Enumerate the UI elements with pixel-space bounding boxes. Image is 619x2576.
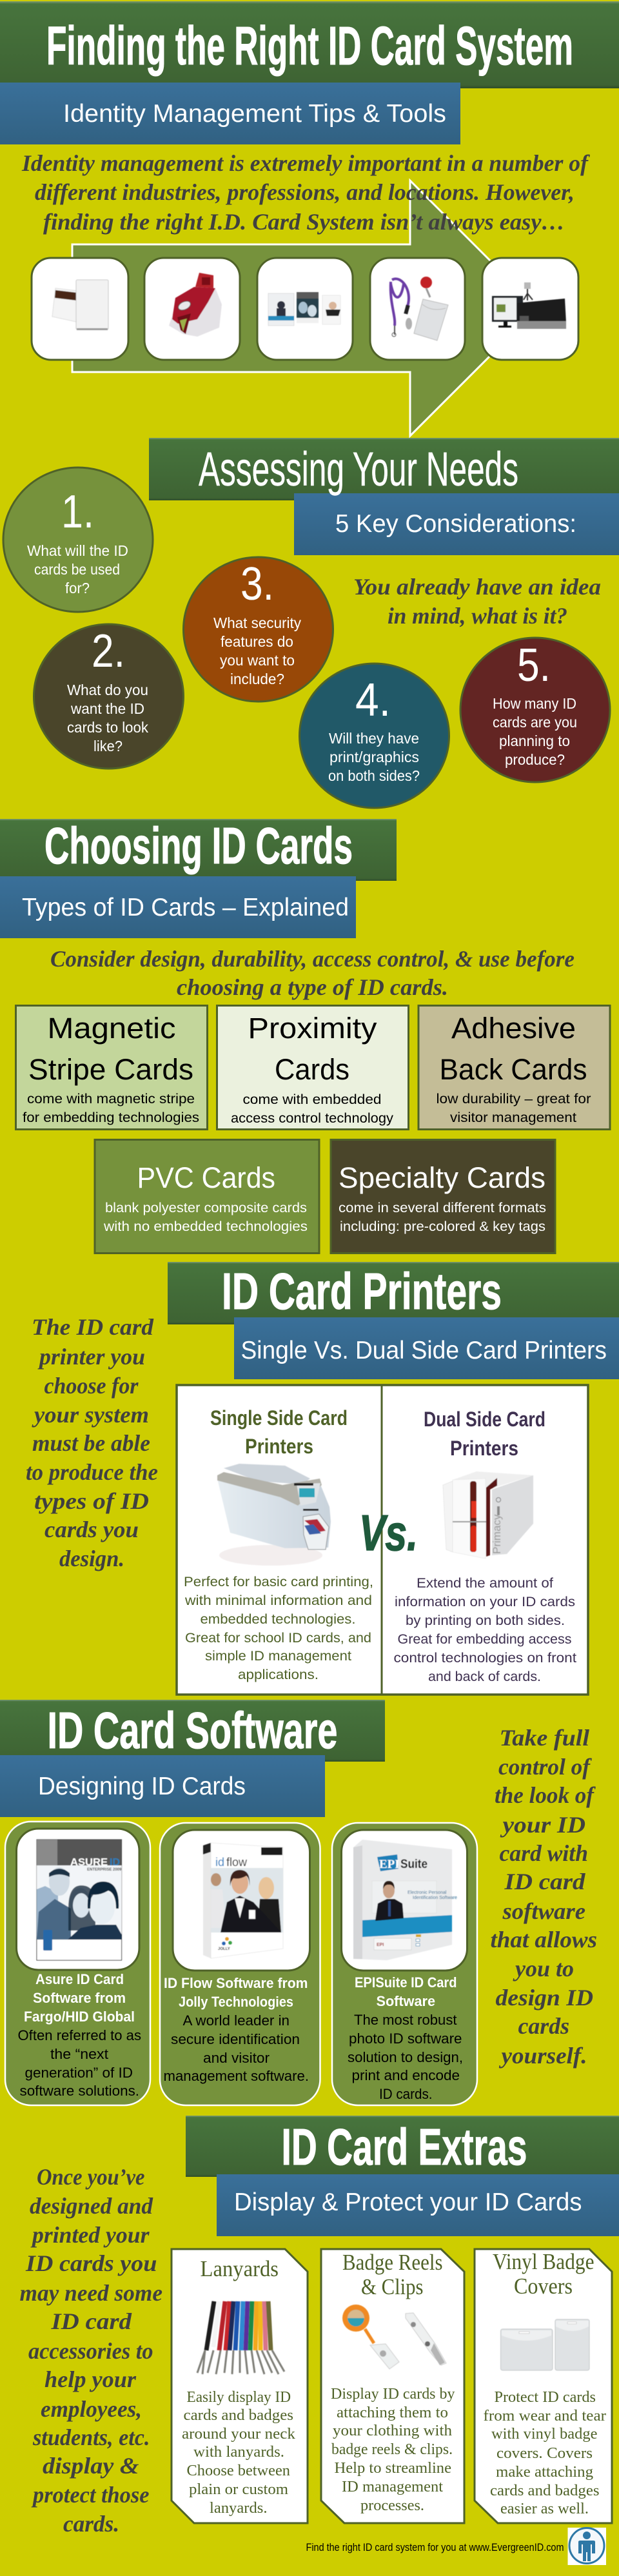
intro text: Identity management is extremely important in a number of <box>21 150 590 176</box>
script note: printer choice: to produce the <box>26 1459 158 1485</box>
script note: printer choice: choose for <box>44 1373 139 1399</box>
panel: vinyl badge covers <box>475 2249 612 2523</box>
software name: ID Flow Software from <box>164 1975 308 1991</box>
description: with lanyards. <box>193 2444 284 2461</box>
heading: Choosing ID Cards <box>44 817 353 874</box>
description <box>182 2389 295 2517</box>
icon: badge clip <box>406 2313 446 2365</box>
description: attaching them to <box>337 2404 448 2421</box>
icon: single side printer <box>217 1464 331 1566</box>
script note: printer choice: your system <box>32 1402 149 1428</box>
software name: EPISuite ID Card <box>355 1974 457 1991</box>
dual side heading: Printers <box>450 1437 518 1460</box>
software name: Fargo/HID Global <box>24 2009 135 2025</box>
script note: software: card with <box>499 1840 588 1866</box>
software name <box>164 1975 308 2010</box>
heading <box>493 2249 594 2299</box>
heading: & Clips <box>361 2274 423 2299</box>
script note: accessories: Once you’ve <box>37 2164 145 2190</box>
script note: software: control of <box>498 1754 592 1780</box>
panel: magnetic stripe cards: Magnetic <box>48 1012 175 1045</box>
software name: Software <box>377 1993 435 2009</box>
description: cards and badges <box>490 2483 600 2499</box>
icon: id flow box: flow <box>226 1856 248 1869</box>
circle 3: include? <box>230 671 284 687</box>
circle 3: features do <box>221 633 293 650</box>
panel: pvc cards: PVC Cards <box>137 1161 275 1194</box>
panel: pvc cards <box>95 1140 319 1254</box>
panel: proximity cards: come with embedded <box>242 1092 382 1107</box>
single side text: applications. <box>238 1667 319 1682</box>
panel: adhesive back cards: Adhesive <box>451 1012 576 1045</box>
circle 2: like? <box>93 738 123 754</box>
icon: red printer <box>169 273 222 337</box>
software description: photo ID software <box>349 2030 462 2047</box>
section header: choosing id cards <box>0 817 397 938</box>
subtitle: Identity Management Tips & Tools <box>63 100 446 128</box>
circle 1: cards be used <box>34 561 120 578</box>
circle 1: for? <box>65 580 90 596</box>
script note: accessories <box>19 2164 162 2537</box>
script note: your idea <box>353 574 601 629</box>
software name: Jolly Technologies <box>179 1994 293 2010</box>
script note: printer choice: design. <box>59 1546 124 1571</box>
circle 2 <box>34 624 183 769</box>
single side heading: Printers <box>245 1435 313 1458</box>
panel: proximity cards: Cards <box>275 1053 349 1086</box>
subheading: 5 Key Considerations: <box>335 510 576 538</box>
single side heading: Single Side Card <box>210 1406 348 1430</box>
software description: A world leader in <box>183 2012 290 2029</box>
circle 2: want the ID <box>70 700 144 717</box>
panel: specialty cards: including: pre-colored & key tags <box>340 1219 545 1234</box>
panel: pvc cards: blank polyester composite cards <box>105 1201 307 1215</box>
software name <box>355 1974 457 2009</box>
script note: consider design <box>50 946 575 1000</box>
subheading: Types of ID Cards – Explained <box>22 894 349 921</box>
dual side text: Extend the amount of <box>417 1576 553 1591</box>
heading: Covers <box>514 2274 573 2299</box>
script note: your idea: in mind, what is it? <box>388 603 567 629</box>
script note: software: software <box>502 1898 585 1924</box>
script note: accessories: designed and <box>30 2193 153 2219</box>
panel: badge reels and clips <box>321 2249 464 2523</box>
script note: accessories: protect those <box>31 2482 150 2508</box>
icon: asure id case: ENTERPRISE 2009 <box>87 1868 122 1872</box>
script note: consider design: Consider design, durability, access control, & use before <box>50 946 575 972</box>
icon: episuite box: Suite <box>400 1858 427 1871</box>
icon: asure id case: ASURE <box>70 1857 108 1868</box>
script note: software: Take full <box>499 1725 589 1751</box>
dual side text: by printing on both sides. <box>406 1613 565 1628</box>
description: your clothing with <box>333 2423 452 2439</box>
icon: episuite box: EPI <box>379 1858 400 1871</box>
single side text <box>184 1575 373 1682</box>
single side text: embedded technologies. <box>200 1612 356 1627</box>
description: ID management <box>342 2479 443 2495</box>
script note: software <box>490 1725 597 2069</box>
panel: magnetic stripe cards: for embedding technologies <box>23 1110 199 1125</box>
circle 4: Will they have <box>329 730 419 747</box>
circle 3: What security <box>213 615 301 631</box>
arrow: process flow <box>72 181 538 436</box>
panel: id flow software <box>160 1823 320 2105</box>
icon: dual side printer: Primacy <box>491 1514 503 1554</box>
heading: ID Card Software <box>48 1702 338 1759</box>
script note: software: the look of <box>495 1782 596 1808</box>
software description <box>348 2012 463 2102</box>
section header: id card printers <box>168 1262 619 1379</box>
script note: accessories: display & <box>43 2453 139 2479</box>
dual side heading <box>424 1408 545 1460</box>
card: blank ID cards <box>32 258 128 360</box>
software name: Asure ID Card <box>35 1971 124 1987</box>
circle 2: What do you <box>67 682 148 698</box>
description: Choose between <box>187 2463 290 2479</box>
icon: asure id case <box>37 1840 122 1960</box>
icon: id flow box <box>203 1843 283 1958</box>
script note: accessories: printed your <box>30 2222 150 2248</box>
dual side text: Great for embedding access <box>397 1632 571 1647</box>
panel: adhesive back cards: Back Cards <box>440 1053 587 1086</box>
icon: software boxes <box>268 292 340 326</box>
intro text: finding the right I.D. Card System isn’t always easy… <box>43 209 565 235</box>
script note: accessories: cards. <box>63 2511 119 2537</box>
panel: adhesive back cards <box>418 1006 610 1130</box>
software description: Often referred to as <box>18 2027 141 2043</box>
script note: software: cards <box>518 2013 569 2039</box>
single side text: with minimal information and <box>184 1593 372 1608</box>
circle 1 <box>3 467 153 612</box>
software description <box>164 2012 309 2084</box>
panel: specialty cards <box>331 1140 555 1254</box>
circle 5: produce? <box>505 751 565 768</box>
panel: magnetic stripe cards: come with magnetic stripe <box>27 1092 195 1106</box>
software description: and visitor <box>203 2050 270 2066</box>
software description: secure identification <box>171 2031 300 2047</box>
software description: ID cards. <box>379 2086 432 2102</box>
section header: id card extras <box>186 2116 619 2236</box>
heading: Badge Reels <box>342 2250 442 2275</box>
dual side text: and back of cards. <box>428 1669 541 1684</box>
script note: software: ID card <box>504 1869 586 1894</box>
circle 2: 2. <box>92 625 125 677</box>
software description <box>18 2027 141 2099</box>
icon: lanyard, reel and badge holder <box>391 277 448 340</box>
circle 3: you want to <box>220 652 295 669</box>
section header: main title <box>0 1 619 144</box>
subheading: Designing ID Cards <box>38 1773 246 1800</box>
circle 3: 3. <box>241 558 274 610</box>
description <box>331 2386 455 2514</box>
software description: solution to design, <box>348 2049 463 2065</box>
description: Help to streamline <box>334 2460 451 2477</box>
description: make attaching <box>496 2464 593 2481</box>
panel: magnetic stripe cards <box>15 1006 208 1130</box>
single side heading <box>210 1406 348 1458</box>
description: Easily display ID <box>187 2389 291 2406</box>
circle 5: planning to <box>499 732 570 749</box>
software description: the “next <box>50 2046 108 2062</box>
software name: Software from <box>33 1990 126 2006</box>
description: cards and badges <box>183 2407 293 2424</box>
script note: accessories: may need some <box>19 2280 162 2306</box>
icon: magnetic stripe and blank cards <box>52 280 108 330</box>
heading: Lanyards <box>200 2256 279 2281</box>
description: processes. <box>360 2497 424 2514</box>
icon: badge reel <box>342 2305 399 2369</box>
software description: software solutions. <box>19 2083 139 2099</box>
circle 1: What will the ID <box>27 542 128 559</box>
software description: print and encode <box>352 2067 460 2083</box>
script note: software: yourself. <box>498 2043 587 2069</box>
script note: printer choice: types of ID <box>34 1488 149 1514</box>
panel: lanyards <box>172 2249 308 2523</box>
script note: your idea: You already have an idea <box>353 574 601 600</box>
script note: accessories: ID card <box>50 2308 132 2334</box>
description: Display ID cards by <box>331 2386 455 2403</box>
card: accessories <box>370 258 465 360</box>
panel: magnetic stripe cards: Stripe Cards <box>28 1053 193 1086</box>
script note: accessories: ID cards you <box>25 2250 157 2276</box>
heading <box>342 2250 442 2299</box>
icon: episuite box <box>353 1840 457 1960</box>
script note: accessories: help your <box>44 2366 137 2392</box>
icon: episuite box: EPI <box>377 1943 384 1947</box>
circle 1: 1. <box>61 486 94 538</box>
script note: printer choice: cards you <box>44 1517 139 1542</box>
description: covers. Covers <box>496 2445 593 2462</box>
software description: management software. <box>164 2068 309 2084</box>
script note: software: design ID <box>495 1985 593 2011</box>
icon: colored lanyards <box>197 2301 284 2374</box>
dual side text: information on your ID cards <box>395 1595 575 1609</box>
circle 5: cards are you <box>493 714 577 731</box>
script note: accessories: employees, <box>41 2396 142 2422</box>
description: with vinyl badge <box>491 2426 597 2443</box>
description: badge reels & clips. <box>331 2441 453 2458</box>
icon: id flow box: JOLLY <box>218 1947 230 1951</box>
card: full system <box>482 258 578 360</box>
panel: adhesive back cards: low durability – great for <box>436 1092 591 1106</box>
circle 4: print/graphics <box>329 749 419 765</box>
description: easier as well. <box>500 2501 589 2517</box>
heading: Vinyl Badge <box>493 2249 594 2274</box>
icon: monitor, camera and printer <box>492 282 566 329</box>
circle 5: 5. <box>517 640 551 691</box>
description: around your neck <box>182 2426 295 2443</box>
single side text: Perfect for basic card printing, <box>184 1575 373 1589</box>
heading: ID Card Printers <box>222 1263 502 1320</box>
panel: episuite software <box>332 1823 477 2105</box>
description: Protect ID cards <box>494 2389 596 2406</box>
card: ID card printer <box>144 258 240 360</box>
software description: The most robust <box>354 2012 457 2028</box>
icon: asure id case: ID <box>110 1857 120 1868</box>
circle 5: How many ID <box>493 695 576 712</box>
script note: printer choice: The ID card <box>32 1314 154 1340</box>
dual side text: control technologies on front <box>393 1651 576 1666</box>
icon: vinyl covers <box>500 2319 589 2370</box>
script note: software: you to <box>513 1956 574 1981</box>
icon: id flow box: id <box>215 1856 224 1869</box>
icon: dual side printer <box>443 1471 533 1558</box>
script note: accessories: students, etc. <box>32 2424 150 2450</box>
logo: evergreen id <box>567 2528 606 2565</box>
circle 4: 4. <box>355 674 391 726</box>
subheading: Single Vs. Dual Side Card Printers <box>241 1337 607 1364</box>
dual side heading: Dual Side Card <box>424 1408 545 1431</box>
description: from wear and tear <box>484 2408 606 2424</box>
description: plain or custom <box>189 2481 288 2498</box>
footer text: Find the right ID card system for you at www.EvergreenID.com <box>306 2541 564 2553</box>
software description: generation” of ID <box>25 2065 133 2081</box>
section header: id card software <box>0 1700 385 1817</box>
dual side text <box>393 1576 576 1684</box>
description: lanyards. <box>210 2500 267 2517</box>
panel: pvc cards: with no embedded technologies <box>103 1219 308 1234</box>
script note: software: that allows <box>490 1927 597 1952</box>
script note: printer choice: must be able <box>32 1430 150 1456</box>
icon: episuite box: Electronic Personal <box>408 1891 447 1895</box>
panel: proximity cards <box>217 1006 409 1130</box>
panel: specialty cards: come in several different formats <box>339 1201 546 1215</box>
card: ID software <box>257 258 353 360</box>
intro text: different industries, professions, and locations. However, <box>35 179 575 205</box>
script note: printer choice <box>26 1314 158 1571</box>
description <box>484 2389 606 2517</box>
script note: consider design: choosing a type of ID cards. <box>177 974 448 1000</box>
intro text <box>21 150 590 235</box>
circle 3 <box>183 557 333 702</box>
subheading: Display & Protect your ID Cards <box>234 2188 582 2216</box>
single side text: Great for school ID cards, and <box>185 1631 371 1646</box>
panel: proximity cards: Proximity <box>248 1012 377 1045</box>
software name <box>24 1971 135 2025</box>
script note: accessories: accessories to <box>28 2338 153 2364</box>
panel: asure id software <box>5 1822 150 2105</box>
script note: software: your ID <box>500 1812 585 1838</box>
circle 2: cards to look <box>67 719 148 736</box>
script note: printer choice: printer you <box>37 1344 145 1370</box>
single side text: simple ID management <box>205 1649 351 1664</box>
panel: specialty cards: Specialty Cards <box>339 1161 545 1194</box>
icon: episuite box: Identification Software <box>413 1896 457 1900</box>
circle 4: on both sides? <box>328 767 420 784</box>
panel: adhesive back cards: visitor management <box>450 1110 576 1125</box>
circle 4 <box>299 664 449 808</box>
vs label: Vs. <box>359 1504 418 1561</box>
panel: printer comparison <box>177 1385 588 1695</box>
panel: proximity cards: access control technology <box>231 1111 394 1126</box>
circle 5 <box>460 638 610 782</box>
section header: assessing your needs <box>149 438 619 555</box>
